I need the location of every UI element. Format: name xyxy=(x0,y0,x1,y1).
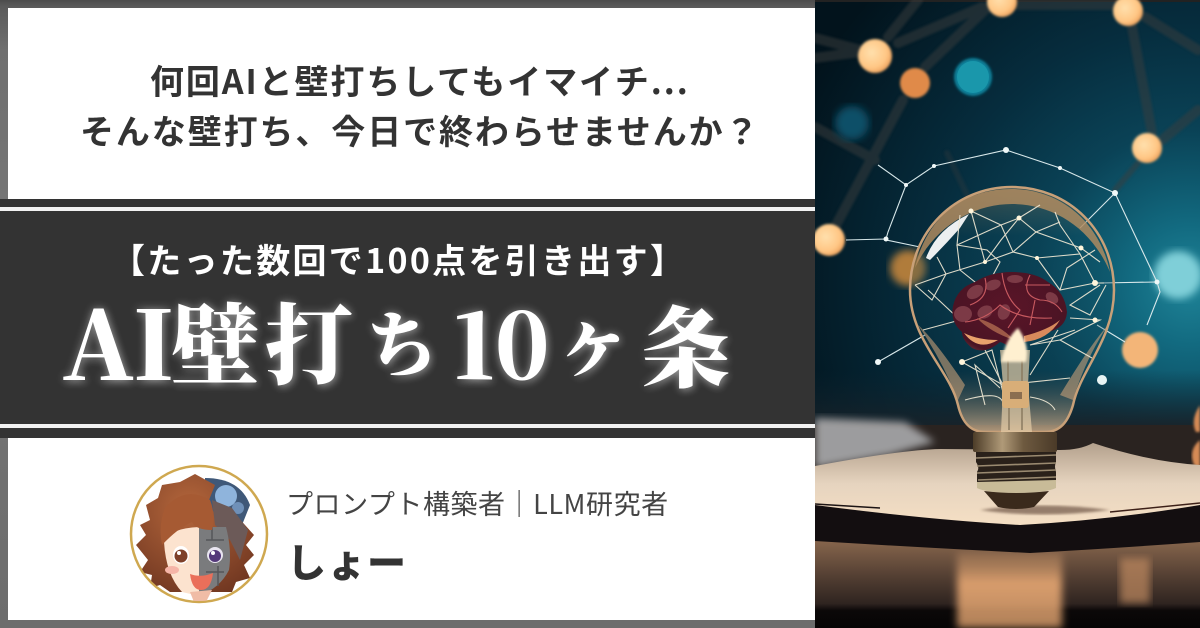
bulb screw base xyxy=(973,432,1057,509)
author role: プロンプト構築者｜LLM研究者 xyxy=(286,483,669,522)
lead text line 1: 何回AIと壁打ちしてもイマイチ... xyxy=(150,55,690,104)
blurred object left xyxy=(815,418,935,468)
title: 壁: 壁 xyxy=(171,277,259,403)
title: ヶ: ヶ xyxy=(554,279,634,394)
title: 条: 条 xyxy=(642,280,730,406)
title: AI: AI xyxy=(62,272,174,408)
paper stack xyxy=(815,505,1200,553)
band top rule xyxy=(0,207,816,211)
filament stem xyxy=(1000,350,1032,432)
title: ち: ち xyxy=(366,288,438,392)
lead text line 2: そんな壁打ち、今日で終わらせませんか？ xyxy=(80,105,760,154)
author name: しょー xyxy=(287,533,407,589)
photo: light bulb with brain xyxy=(815,0,1200,628)
bokeh lights xyxy=(813,0,1200,385)
background xyxy=(815,0,1200,628)
brain xyxy=(952,272,1067,362)
icon: author avatar xyxy=(130,464,268,604)
subheading: 【たった数回で100点を引き出す】 xyxy=(111,234,686,283)
panel: bottom white author panel xyxy=(8,438,815,620)
bulb glass xyxy=(910,187,1114,432)
blurred network strands xyxy=(815,0,1198,227)
band bottom rule xyxy=(0,424,816,428)
panel: top white lead panel xyxy=(8,8,815,199)
title: 打: 打 xyxy=(265,277,353,403)
bulb inner network xyxy=(915,205,1106,410)
outer network lines xyxy=(846,150,1160,362)
main title xyxy=(61,272,731,408)
panel: gray frame xyxy=(0,0,816,628)
panel: dark title band xyxy=(0,199,816,438)
table xyxy=(815,425,1200,545)
title: 10: 10 xyxy=(453,275,550,405)
